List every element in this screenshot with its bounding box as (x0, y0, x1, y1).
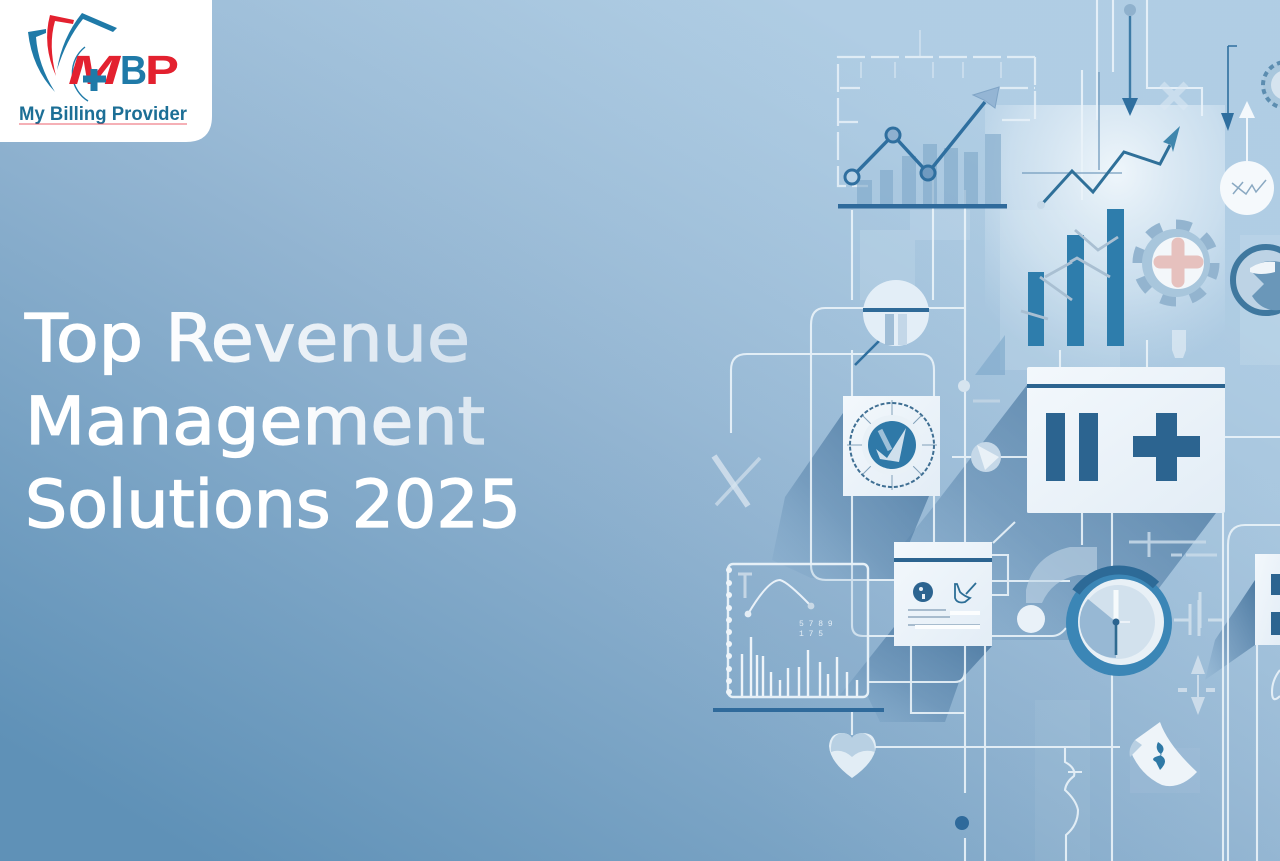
small hand glyph (1172, 330, 1186, 358)
base line (713, 708, 884, 712)
signal pulse glyph (1174, 592, 1222, 636)
up and down arrows (1178, 655, 1215, 715)
trend line (852, 102, 985, 177)
diagonal card shadows (772, 385, 1255, 722)
mini bars (742, 637, 857, 696)
notepad chart (713, 564, 884, 712)
big card: bars and plus (1027, 367, 1225, 513)
curved elbow pipe with node (1017, 547, 1097, 633)
pale vertical panels (860, 210, 1280, 861)
curve (748, 580, 811, 614)
base line (838, 204, 1007, 208)
faint cross mark: left (714, 456, 760, 506)
wordmark: My Billing Provider (19, 104, 188, 125)
growth line chart (1022, 72, 1180, 209)
red arc (47, 15, 74, 76)
junction nodes (958, 380, 1001, 472)
chart panel: dashed frame with rising trend (838, 30, 1035, 208)
title: Solutions 2025 (25, 466, 521, 543)
bar chart with overlaid lines (1021, 209, 1124, 346)
white node with up arrow (1220, 101, 1274, 215)
partial right card (1255, 554, 1280, 645)
gear with medical cross (1138, 225, 1214, 301)
right blue arc (57, 13, 117, 70)
curled paper note (1130, 722, 1200, 793)
heart (829, 733, 876, 778)
tick marks (861, 30, 1001, 78)
faint triangle (975, 335, 1005, 375)
half circle node with diagonal (855, 280, 929, 365)
partial gauge icon: top right (1263, 62, 1280, 108)
clock (1066, 570, 1172, 676)
medical plus (83, 69, 106, 91)
down arrow: right (1221, 46, 1237, 131)
micro labels: 5 7 8 9 (799, 620, 833, 629)
notepad chart: 1 7 5 (799, 630, 823, 639)
glow panel behind growth chart (985, 105, 1225, 375)
logo badge: P (145, 47, 179, 93)
plus and dash glyphs (1129, 532, 1217, 557)
logo badge (0, 0, 212, 142)
circuit connector lines (731, 0, 1280, 861)
title (24, 300, 521, 543)
bars (857, 134, 1001, 204)
down arrow: top centre (1122, 4, 1138, 116)
small card with icons (894, 542, 992, 646)
dark dot (955, 816, 969, 830)
logo badge: B (120, 47, 147, 93)
title: Top Revenue (24, 300, 470, 377)
data nodes (845, 170, 859, 184)
left blue arc (28, 29, 55, 92)
arrow head (973, 87, 999, 108)
binder dots (726, 567, 732, 695)
thin ring (72, 47, 88, 101)
cross mark: faint (1162, 84, 1186, 108)
MBP monogram: M (68, 47, 121, 93)
dashed frame (838, 57, 1035, 186)
title: Management (25, 383, 485, 460)
ring icon: right edge (1233, 247, 1280, 313)
check badge card (843, 396, 940, 496)
